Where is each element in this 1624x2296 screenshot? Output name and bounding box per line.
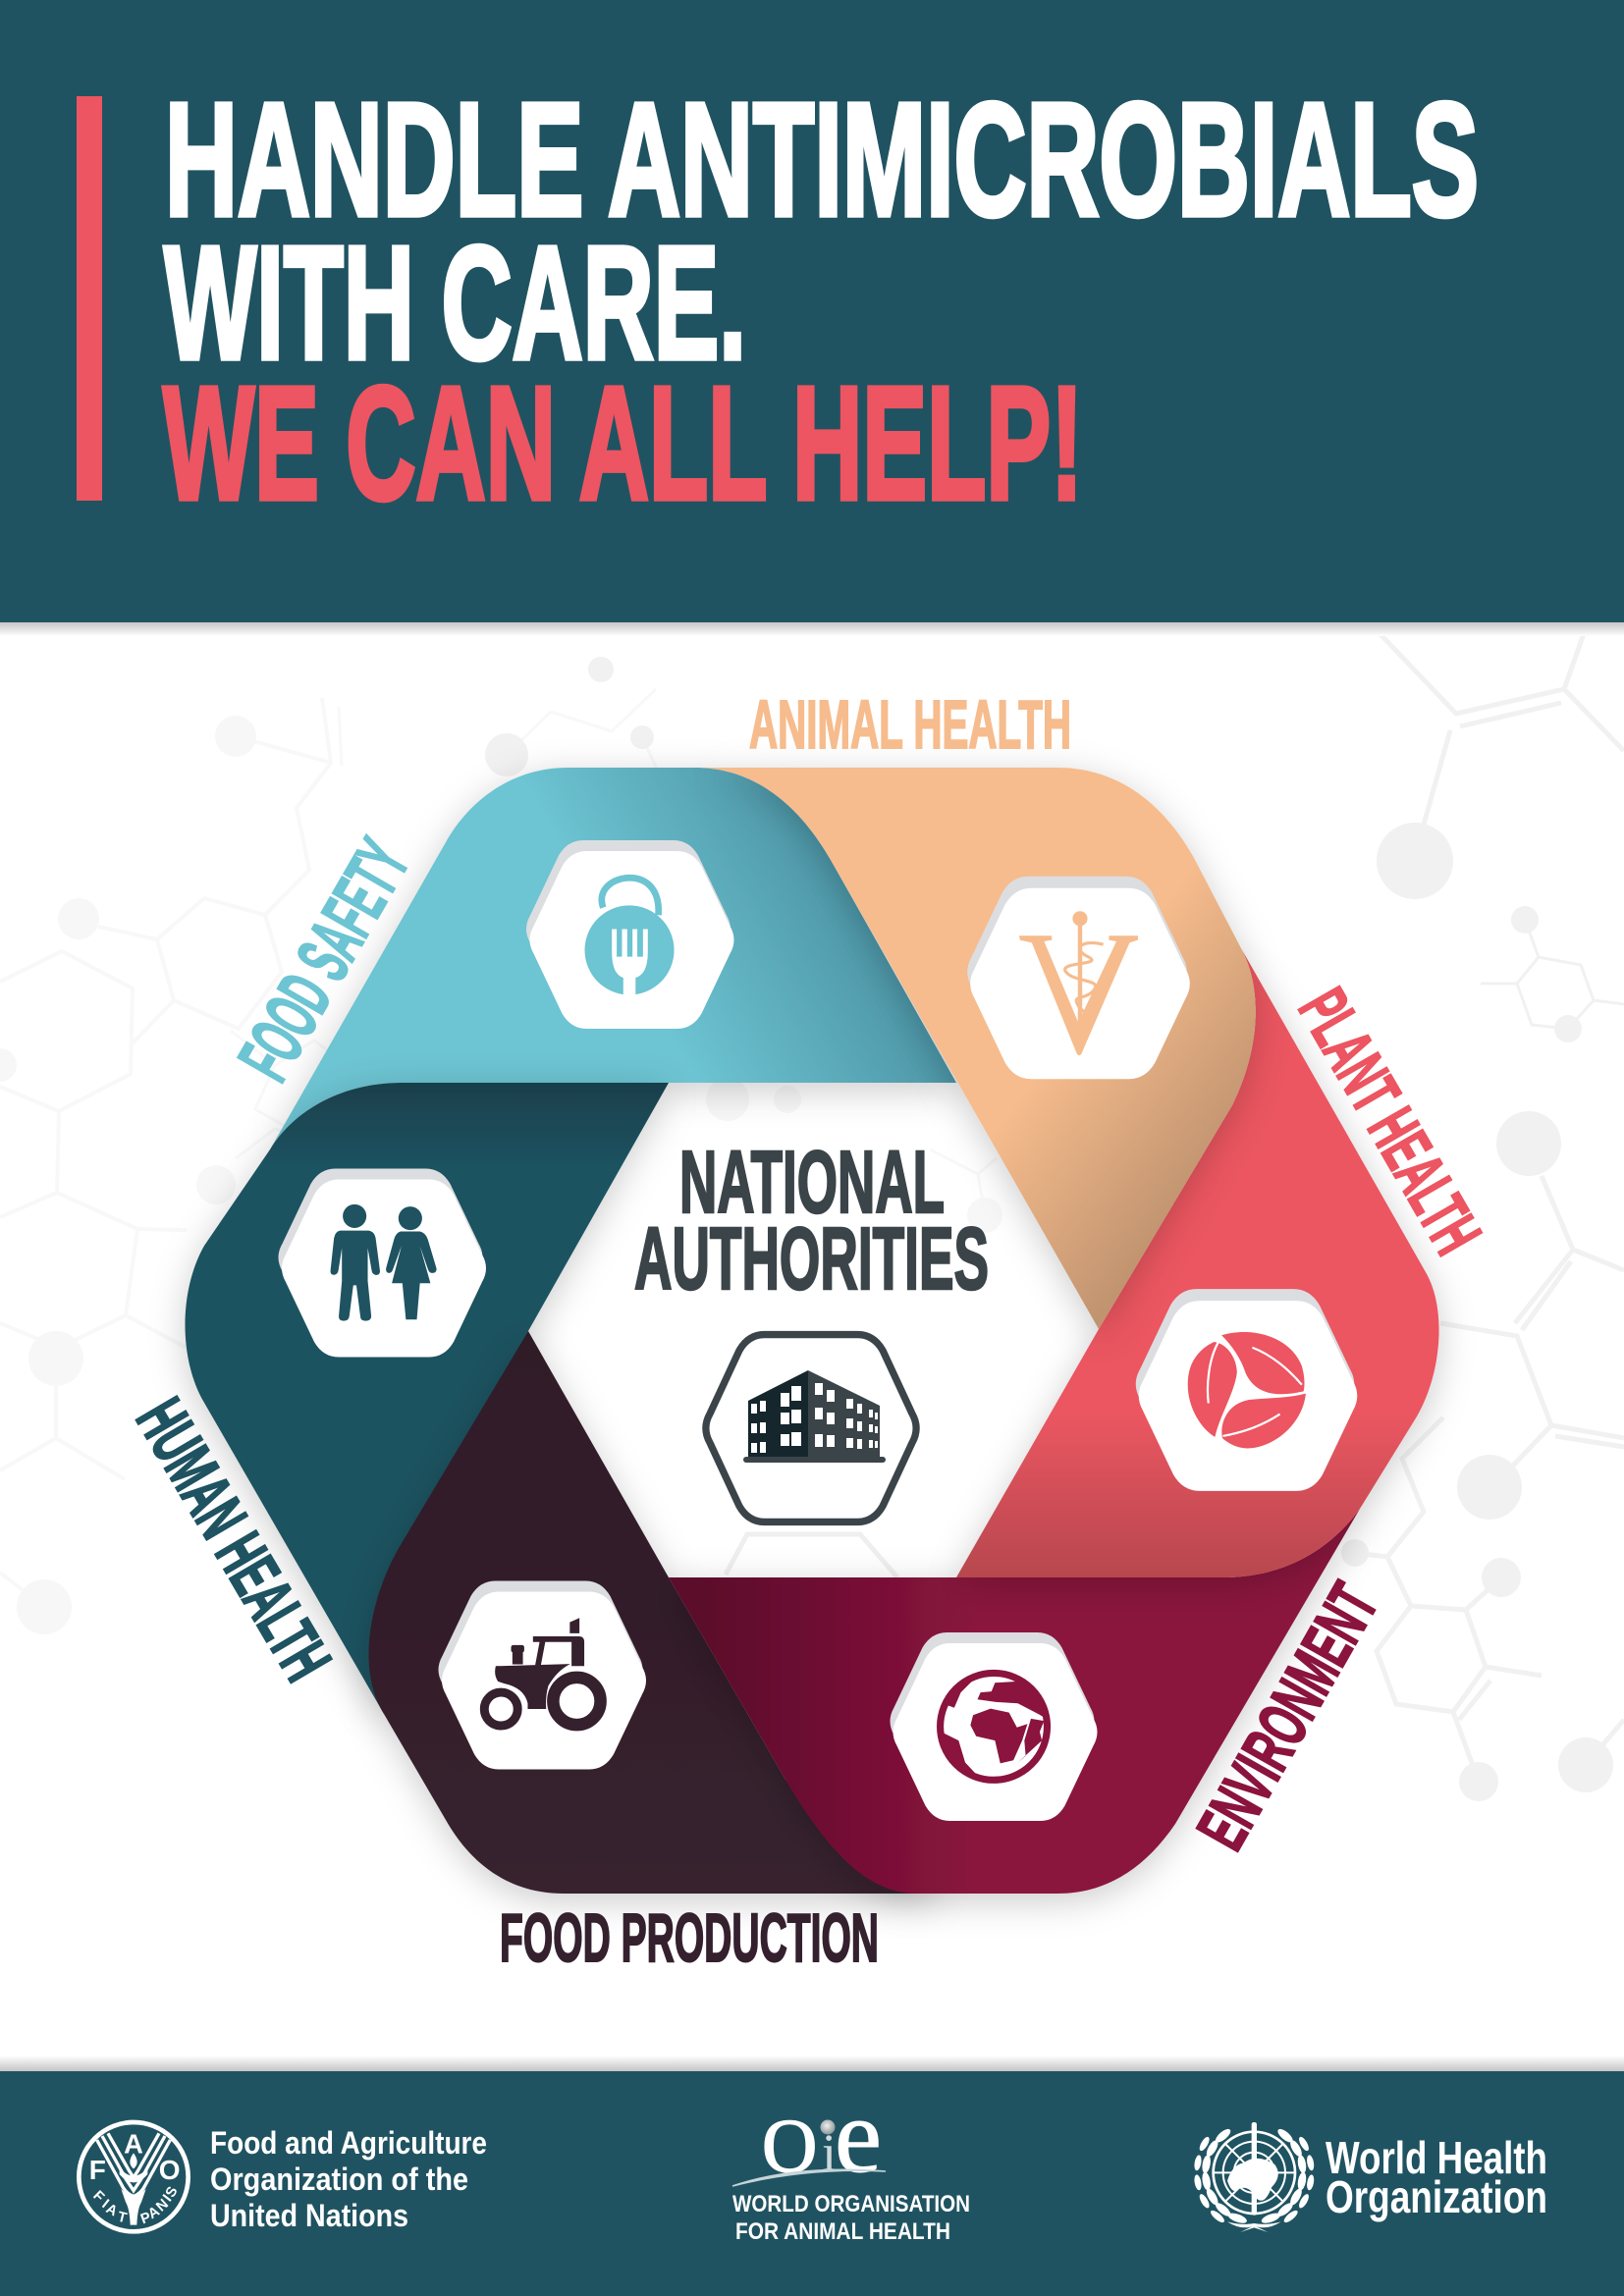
logo: WHO: World Health [1326,2132,1547,2183]
logo: FAO: United Nations [210,2198,408,2233]
icon: veterinary caduceus [967,877,1190,1079]
logo: OIE: FOR ANIMAL HEALTH [735,2218,950,2245]
icon: three leaves [1136,1289,1357,1491]
center heading: national authorities: AUTHORITIES [634,1210,989,1308]
label: animal health: ANIMAL HEALTH [749,686,1071,763]
segment: animal health [695,768,1256,1329]
footer band [0,2056,1624,2296]
logo: FAO: A [124,2128,143,2159]
logo: FAO: O [159,2155,181,2185]
icon: man and woman [279,1168,486,1357]
segment: human health [185,1083,669,1714]
label: plant health: PLANT HEALTH [1284,976,1496,1266]
logo: WHO [1193,2122,1547,2232]
logo: FAO: A [103,2201,120,2220]
logo: OIE: i [822,2123,837,2182]
logo: FAO: T [116,2210,129,2226]
logo: FAO: A [145,2204,163,2222]
hexagonal cycle diagram [185,768,1439,1894]
logo: FAO: F [89,2188,107,2206]
logo: FAO: F [89,2155,106,2185]
header band [0,0,1624,636]
logo: OIE: O [762,2103,817,2188]
logo: OIE: WORLD ORGANISATION [732,2191,970,2217]
logo: FAO: N [153,2197,172,2216]
center heading: national authorities: NATIONAL [679,1134,945,1232]
logo: OIE: e [835,2078,882,2195]
logo: FAO: Food and Agriculture [210,2125,487,2161]
accent bar [77,96,102,501]
segment: food safety [270,768,956,1149]
center heading: national authorities [634,1134,989,1308]
logo: FAO: Organization of the [210,2162,468,2197]
label: food safety: FOOD SAFETY [223,827,426,1094]
label: human health: HUMAN HEALTH [122,1386,346,1693]
icon: food safety lock and fork [526,840,734,1029]
icon: globe [890,1632,1098,1821]
background molecule pattern [0,628,1624,2083]
icon: tractor [438,1580,646,1769]
title: WITH CARE. [164,213,746,393]
segment: plant health [956,948,1439,1577]
logo: FAO: I [99,2197,112,2212]
logo: FAO: P [138,2210,153,2227]
title [163,70,1479,533]
logo: FAO: I [160,2192,175,2205]
logo: WHO: Organization [1326,2171,1547,2222]
label: food production: FOOD PRODUCTION [500,1899,879,1976]
logo: FAO [79,2122,487,2233]
segment: environment [669,1509,1360,1894]
segment: food production [369,1331,933,1894]
logo: OIE [732,2078,970,2245]
icon: building in hexagon [706,1335,916,1522]
label: environment: ENVIRONMENT [1182,1572,1392,1861]
logo: FAO: S [163,2184,182,2201]
